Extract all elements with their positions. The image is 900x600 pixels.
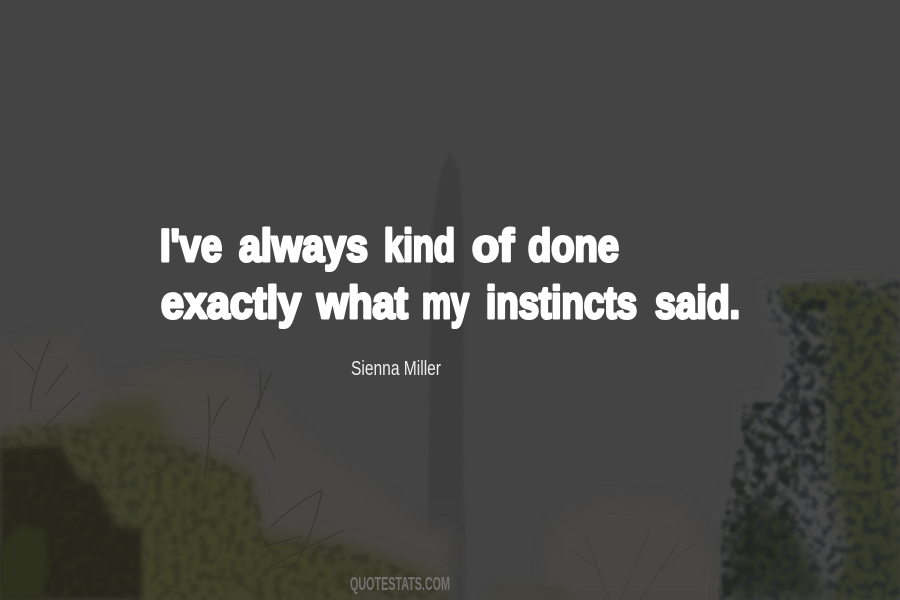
- distant bare tree: [480, 500, 725, 600]
- author name: Sienna Miller: [351, 358, 441, 380]
- quote line 1: of: [472, 220, 515, 271]
- left foliage texture: [0, 420, 450, 600]
- quote line 1: done: [528, 220, 619, 271]
- quote text: [160, 220, 740, 328]
- quote line 1: I've: [160, 220, 222, 271]
- quote line 2: instincts: [486, 277, 637, 328]
- quote line 2: [161, 277, 740, 328]
- right foliage texture: [718, 278, 900, 600]
- quote line 2: exactly: [161, 277, 301, 328]
- quote line 1: kind: [384, 220, 455, 271]
- quote line 1: [160, 220, 619, 271]
- watermark: QUOTESTATS.COM: [350, 574, 450, 594]
- quote line 2: what: [316, 277, 408, 328]
- quote line 2: my: [422, 277, 469, 328]
- bare branches: [15, 340, 345, 570]
- quote line 2: said.: [655, 277, 740, 328]
- quote line 1: always: [239, 220, 368, 271]
- right trees: [718, 278, 900, 600]
- left trees: [0, 335, 450, 600]
- monument silhouette: [427, 152, 464, 600]
